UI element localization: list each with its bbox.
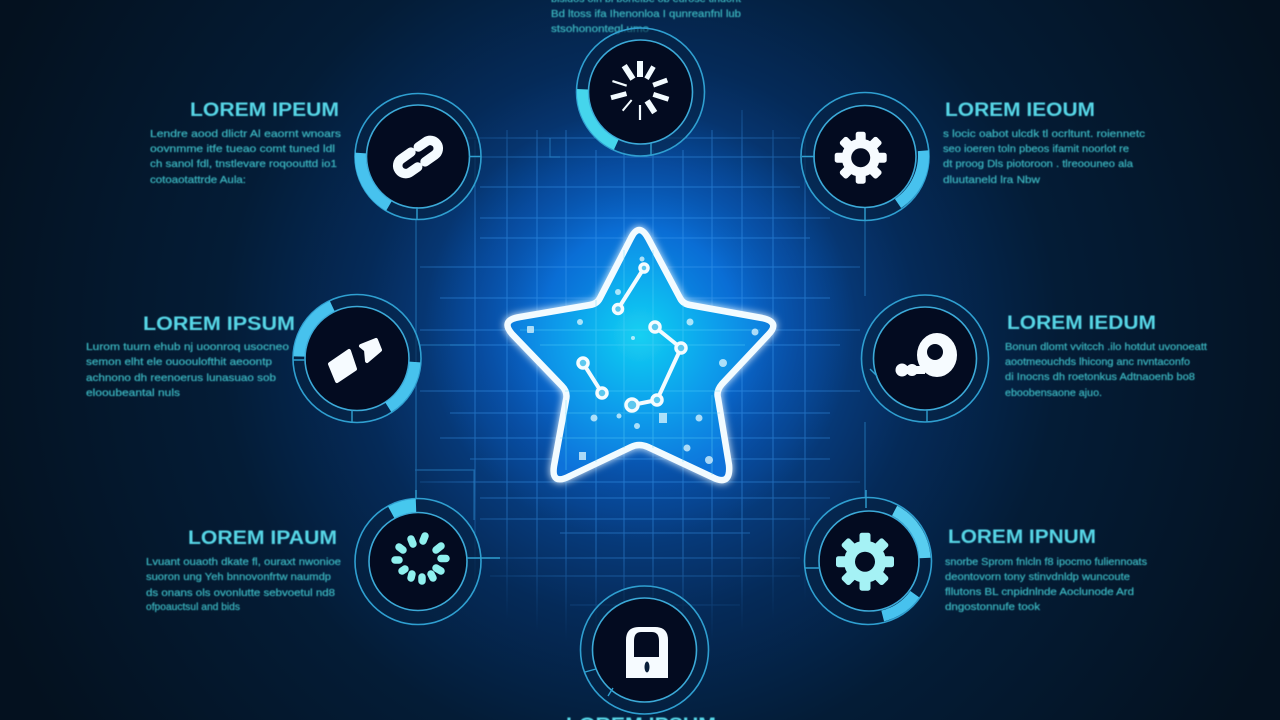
heading: lower right: LOREM IPNUM [948,527,1096,548]
text: right: Bonun dlomt vvitcch .ilo hotdut uvonoeatt [1005,341,1207,353]
constellation lines [583,268,681,405]
background grid [416,110,860,640]
text: lower left: ds onans ols ovonlutte sebvoetul nd8 [146,587,335,599]
text: right: aootmeouchds lhicong anc nvntaconfo [1005,356,1190,368]
text: upper right: dt proog Dls piotoroon . tlreoouneo ala [943,158,1133,170]
text: lower right: snorbe Sprom fnlcln f8 ipocmo fuliennoats [945,556,1147,568]
text: upper left: oovnmme itfe tueao comt tuned ldl [150,143,335,155]
icon: gear cyan [836,533,894,591]
panel: left [86,294,421,422]
text: upper left: ch sanol fdl, tnstlevare roqoouttd io1 [150,158,337,170]
text: lower left: Lvuant ouaoth dkate fl, ouraxt nwonioe [146,556,341,568]
icon: loading spinner [611,61,669,120]
text: lower right [945,556,1147,613]
star [508,230,773,480]
ring: right [862,295,988,422]
text: left: achnono dh reenoerus lunasuao sob [86,372,276,384]
ring: lower left [355,490,500,624]
text: lower left [146,556,341,613]
ring: upper left [355,94,481,220]
small star glyphs [527,256,758,464]
panel: lower right [804,490,1147,624]
heading and text: top [551,0,741,35]
icon: chain link [395,137,441,177]
text: upper right: seo ioeren toln pbeos ifamit noorlot re [943,143,1129,155]
text: upper left: cotoaotattrde Aula: [150,174,246,186]
text: left [86,341,289,399]
heading: right: LOREM IEDUM [1007,313,1156,334]
icon: broken link [330,340,380,381]
ring: left [293,294,421,422]
text: lower right: dngostonnufe took [945,601,1041,613]
text: right: di Inocns dh roetonkus Adtnaoenb bo8 [1005,371,1195,383]
text: upper right: s locic oabot ulcdk tl ocrltunt. roiennetc [943,128,1145,140]
heading: upper right: LOREM IEOUM [945,100,1095,121]
text: lower right: fllutons BL cnpidnlnde Aoclunode Ard [945,586,1134,598]
heading: left: LOREM IPSUM [143,314,295,335]
text: upper right: dluutaneld lra Nbw [943,174,1040,186]
ring: lower right [804,490,932,624]
text: lower right: deontovorn tony stinvdnldp wuncoute [945,571,1130,583]
text: right [1005,341,1207,399]
star fill and outline [508,230,773,480]
icon: gear [835,132,887,184]
text: lower left: ofpoauctsul and bids [146,601,240,613]
text: lower left: suoron ung Yeh bnnovonfrtw naumdp [146,571,331,583]
heading and text: top: stsohonontegl.umo [551,23,649,35]
text: right: eboobensaone ajuo. [1005,387,1102,399]
text: upper right [943,128,1145,186]
text: left: elooubeantal nuls [86,387,180,399]
panel: bottom [566,586,716,720]
heading: lower left: LOREM IPAUM [188,528,337,549]
panel: lower left [146,490,500,624]
keyhole [644,662,650,672]
text: left: Lurom tuurn ehub nj uoonroq usocneo [86,341,289,353]
panel: upper right [801,92,1145,220]
ring: top [576,28,704,156]
icon: padlock [626,627,668,678]
text: upper left [150,128,341,186]
icon: dotted spinner [395,536,446,581]
connector lines [415,138,865,520]
panel: right [862,295,1207,422]
ring: bottom [580,586,708,714]
text: upper left: Lendre aood dlictr Al eaornt wnoars [150,128,341,140]
inner grid lines [520,250,760,475]
heading and text: top: Bd ltoss ifa Ihenonloa I qunreanfnl lub [551,8,741,20]
panel: top [551,0,741,156]
icon: ring with trailing dots [896,333,957,377]
constellation nodes [578,264,686,411]
text: left: semon elht ele ouooulofthit aeoontp [86,356,272,368]
heading: upper left: LOREM IPEUM [190,100,339,121]
ring: upper right [801,92,929,220]
panel: upper left [150,94,481,220]
center glow [380,80,900,580]
